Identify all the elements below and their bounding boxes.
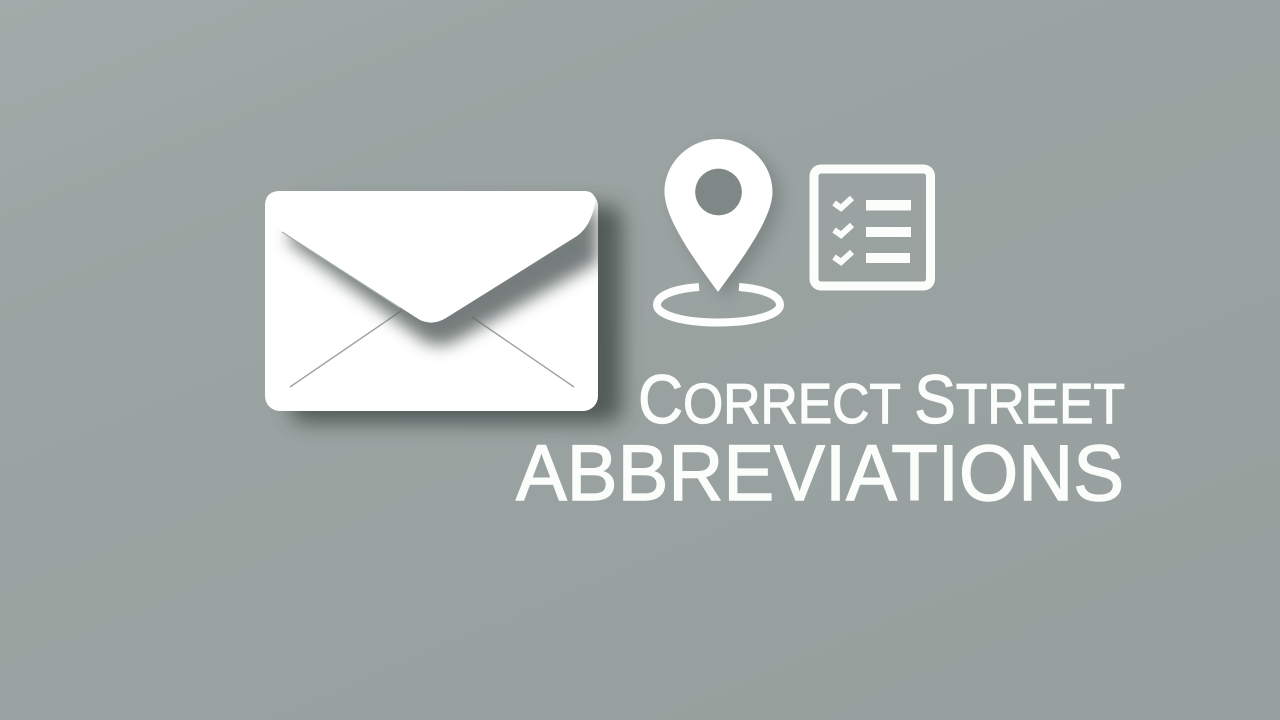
pin body [664, 139, 772, 292]
pin shadow [673, 146, 781, 298]
envelope flap [265, 191, 595, 323]
title line 2: ABBREVIATIONS [516, 428, 1124, 517]
flap edge line [282, 232, 400, 308]
check marks [834, 198, 852, 262]
envelope drop shadow [290, 205, 622, 423]
envelope lower fold lines [290, 311, 574, 387]
base ring [657, 287, 780, 322]
envelope body [265, 191, 598, 411]
checklist frame [814, 169, 930, 286]
flap shadow [286, 205, 598, 346]
icon: envelope [265, 191, 622, 423]
list lines [866, 200, 911, 263]
title line 1: CORRECT STREET [638, 361, 1125, 438]
icon: checklist [814, 169, 930, 286]
icon: location pin [657, 139, 781, 322]
